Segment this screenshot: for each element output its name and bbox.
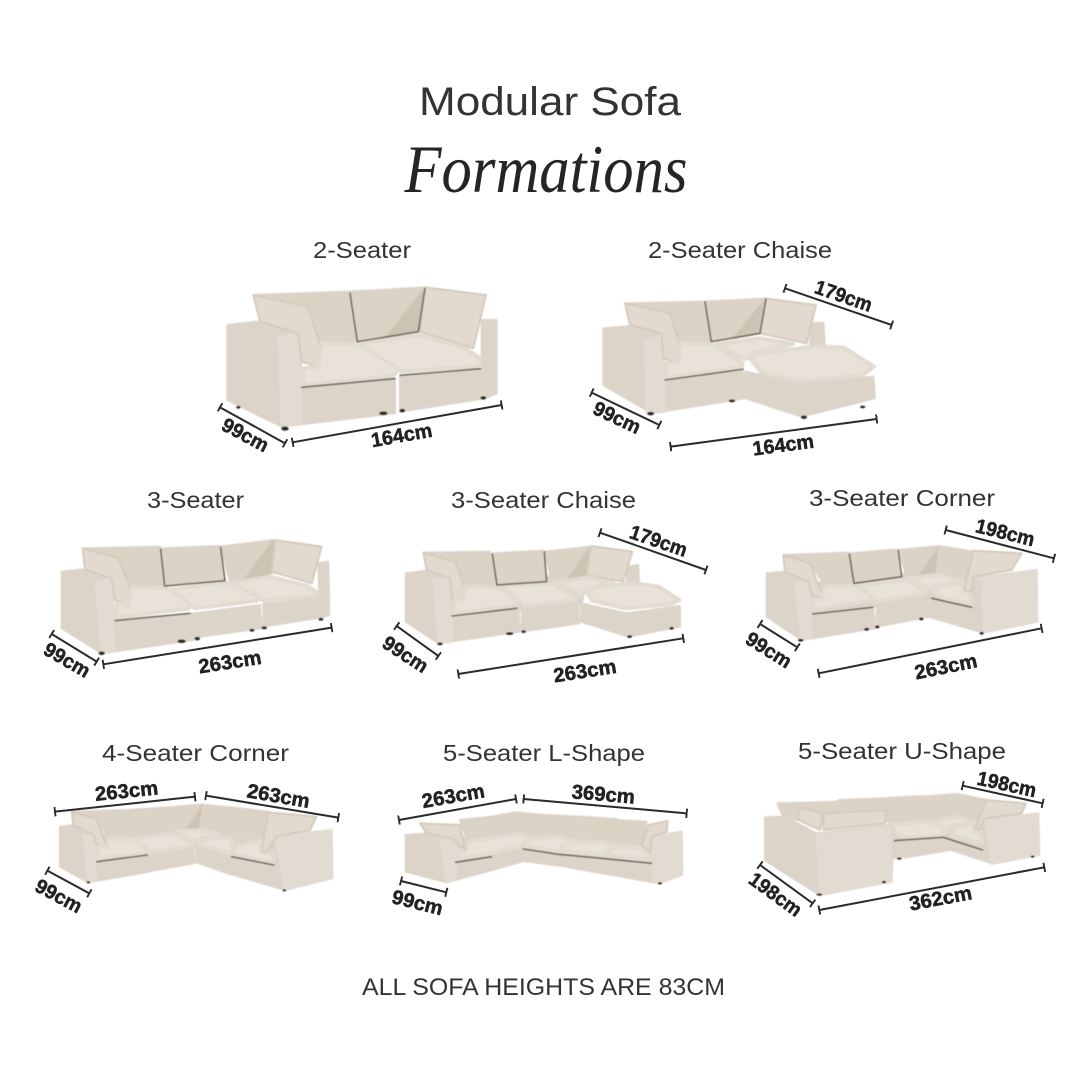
dimension: 263cm left: 263cm [420,780,486,813]
dimension: 179cm [600,522,706,570]
dimension: 198cm: 198cm [973,515,1037,551]
dimension: 99cm depth: 99cm [218,414,272,457]
dimension: 263cm width [458,638,683,687]
heading: 2-Seater Chaise: 2-Seater Chaise [648,237,832,263]
formation: 5-Seater U-Shape [744,768,1044,922]
dimension: 164cm width: 164cm [369,420,434,452]
formation: 3-Seater Chaise [378,522,706,687]
dimension: 263cm width: 263cm [552,656,618,687]
heading: 3-Seater: 3-Seater [147,487,244,513]
sofa: 4-Seater Corner [60,804,333,891]
dimension: 362cm width [819,867,1044,916]
sofa: 3-Seater [62,540,329,655]
dimension: 263cm width: 263cm [197,647,263,678]
heading: 5-Seater L-Shape: 5-Seater L-Shape [443,740,645,766]
footer note: ALL SOFA HEIGHTS ARE 83CM [362,974,725,1001]
formation: 2-Seater Chaise [589,277,892,461]
heading: 5-Seater U-Shape: 5-Seater U-Shape [798,738,1006,764]
dimension: 263cm right: 263cm [245,780,311,813]
formation: 5-Seater L-Shape [390,780,687,920]
dimension: 179cm [785,277,892,325]
dimension: 164cm width [671,419,877,461]
dimension: 263cm left [55,777,195,812]
dimension: 263cm width [103,628,332,678]
dimension: 99cm depth: 99cm [40,639,94,683]
dimension: 263cm width [819,628,1042,684]
dimension: 263cm right [206,780,338,818]
dimension: 362cm width: 362cm [907,882,974,916]
title: Modular Sofa: Modular Sofa [419,80,682,124]
dimension: 179cm: 179cm [627,522,690,562]
sofa: 2-Seater [227,287,497,431]
formation: 3-Seater Corner [741,515,1054,684]
dimension: 164cm width: 164cm [751,431,815,461]
dimension: 198cm depth: 198cm [744,868,806,922]
dimension: 369cm right: 369cm [571,781,636,809]
formation: 4-Seater Corner [31,777,338,918]
dimension: 99cm depth: 99cm [378,632,432,678]
dimension: 263cm width: 263cm [913,650,979,684]
dimension: 198cm top: 198cm [975,768,1038,802]
sofa: 5-Seater U-Shape [765,794,1039,896]
heading: 4-Seater Corner: 4-Seater Corner [102,740,289,766]
sofa: 3-Seater Chaise [406,546,680,645]
dimension: 99cm depth: 99cm [31,875,86,918]
heading: 3-Seater Chaise: 3-Seater Chaise [451,487,636,513]
sofa: 3-Seater Corner [767,546,1037,642]
dimension: 164cm width [293,405,502,452]
dimension: 179cm: 179cm [812,277,875,317]
heading: 2-Seater: 2-Seater [313,237,411,263]
script title: Formations: Formations [404,131,688,207]
dimension: 99cm depth: 99cm [589,398,644,439]
dimension: 369cm right [524,781,687,813]
sofa: 2-Seater Chaise [603,298,875,419]
dimension: 198cm [946,515,1054,558]
dimension: 99cm depth: 99cm [390,886,445,920]
sofa: 5-Seater L-Shape [406,812,682,884]
formation: 3-Seater [40,540,332,683]
heading: 3-Seater Corner: 3-Seater Corner [809,485,995,511]
dimension: 99cm depth: 99cm [741,628,795,673]
dimension: 263cm left: 263cm [94,777,159,806]
dimension: 263cm left [399,780,516,820]
formation: 2-Seater [218,287,502,457]
